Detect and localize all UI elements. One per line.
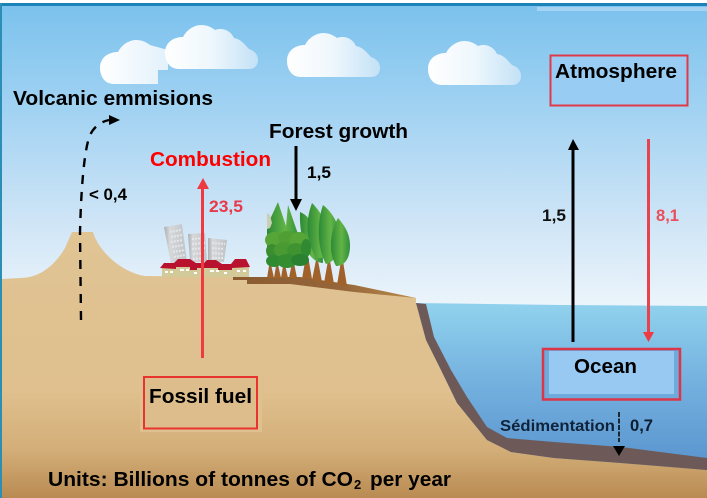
- forest: [265, 202, 350, 286]
- value: volcanic: < 0,4: [89, 186, 128, 204]
- box: ocean: [543, 349, 680, 400]
- box: fossil fuel: Fossil fuel: [149, 385, 252, 408]
- value: ocean to atmosphere: 1,5: [542, 207, 566, 225]
- forest ground: [233, 277, 416, 298]
- round bushes: [265, 231, 311, 268]
- sky background: [0, 0, 707, 310]
- cloud 4: [428, 41, 521, 85]
- arrow: atmosphere to ocean: [643, 139, 654, 342]
- units note: 2: [354, 477, 361, 492]
- tree trunks: [267, 250, 347, 286]
- arrow: sedimentation: [613, 412, 625, 456]
- value: forest growth: 1,5: [307, 164, 331, 182]
- value: atmosphere to ocean: 8,1: [656, 207, 679, 225]
- label: forest growth: Forest growth: [269, 120, 408, 143]
- cloud 3: [287, 33, 380, 77]
- cloud 2: [165, 25, 258, 69]
- cloud 1: [100, 40, 168, 84]
- arrow: combustion: [197, 178, 209, 358]
- arrow: forest growth: [290, 146, 302, 211]
- units note: Units: Billions of tonnes of CO: [48, 469, 353, 491]
- arrow: ocean to atmosphere: [568, 139, 579, 342]
- arrow: volcanic emissions dashed: [80, 115, 120, 320]
- land with volcano: [2, 232, 707, 498]
- houses: [160, 259, 250, 277]
- conifer trees: [267, 202, 350, 266]
- heading: combustion: Combustion: [150, 148, 271, 171]
- value: sedimentation: 0,7: [630, 417, 653, 435]
- label: sedimentation: Sédimentation: [500, 418, 615, 435]
- box: atmosphere: [550, 56, 688, 106]
- seabed sediment band: [416, 303, 707, 470]
- units note: per year: [370, 469, 451, 491]
- ocean water: [416, 303, 707, 475]
- city: buildings and houses: [160, 224, 250, 277]
- value: combustion: 23,5: [209, 198, 243, 216]
- box: atmosphere: Atmosphere: [555, 60, 677, 83]
- box: fossil fuel: [140, 369, 262, 432]
- box: ocean: Ocean: [574, 355, 637, 378]
- label: volcanic emissions: Volcanic emmisions: [13, 87, 213, 110]
- tower blocks: [164, 224, 227, 264]
